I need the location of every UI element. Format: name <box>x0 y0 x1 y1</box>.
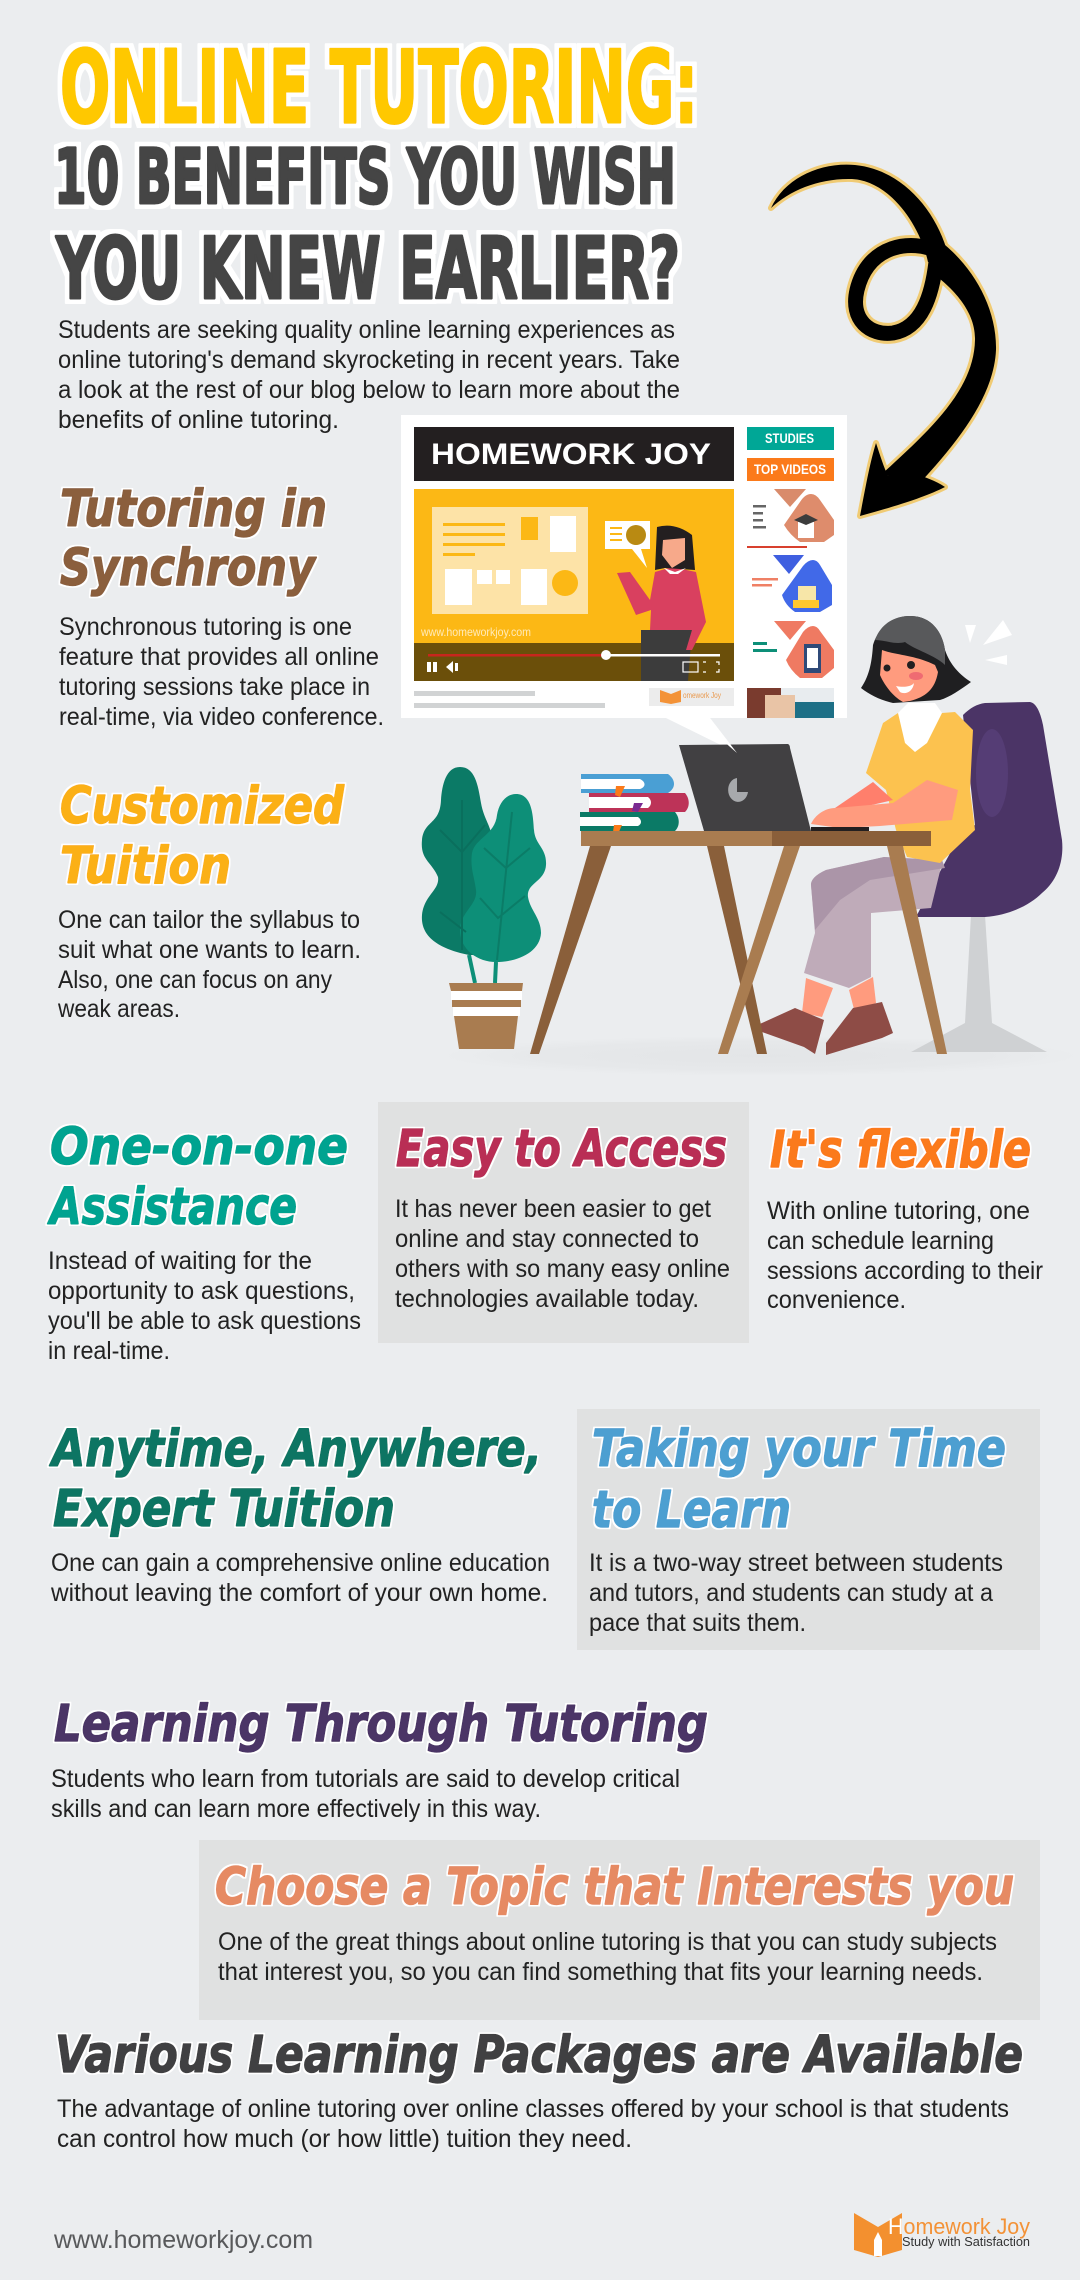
panel: it's flexible: convenience. <box>767 1286 906 1314</box>
icon: curly arrow <box>771 165 996 516</box>
trousers <box>804 857 942 988</box>
panel: one-on-one assistance: you'll be able to ask questions <box>48 1307 361 1335</box>
tab: studies <box>747 427 834 450</box>
panel: one-on-one assistance: One-on-one <box>50 1118 348 1177</box>
panel: easy to access: online and stay connected to <box>395 1225 699 1253</box>
panel: tutoring in synchrony: real-time, via video conference. <box>59 703 384 731</box>
tab: top videos <box>747 458 834 481</box>
icon: surprise sparks <box>965 620 1012 665</box>
panel: anytime, anywhere: Expert Tuition <box>53 1480 395 1539</box>
panel: tutoring in synchrony: Synchronous tutoring is one <box>59 613 352 641</box>
panel: one-on-one assistance: Instead of waiting for the <box>48 1247 312 1275</box>
title: 10 BENEFITS YOU WISH <box>54 132 676 221</box>
panel: choose a topic: One of the great things about online tutoring is that you can study subjects <box>218 1928 997 1956</box>
panel: easy to access: It has never been easier to get <box>395 1195 711 1223</box>
intro text: a look at the rest of our blog below to learn more about the <box>58 376 680 404</box>
panel: taking your time: It is a two-way street between students <box>589 1549 1003 1577</box>
presenter <box>617 526 706 681</box>
panel: customized tuition: weak areas. <box>57 995 180 1023</box>
icon: woman <box>751 616 975 1055</box>
panel: tutoring in synchrony: feature that provides all online <box>59 643 379 671</box>
panel: anytime, anywhere: without leaving the comfort of your own home. <box>50 1579 548 1607</box>
thumbnail: coral <box>747 489 834 548</box>
text placeholders <box>414 691 605 708</box>
panel: it's flexible: sessions according to their <box>767 1257 1043 1285</box>
panel: learning through tutoring: Learning Through Tutoring <box>54 1695 708 1754</box>
hair <box>861 616 971 703</box>
panel: customized tuition: Also, one can focus on any <box>58 966 332 994</box>
panel: anytime, anywhere: One can gain a comprehensive online education <box>51 1549 550 1577</box>
panel: one-on-one assistance: in real-time. <box>48 1337 170 1365</box>
icon: table <box>530 831 947 1054</box>
intro text: benefits of online tutoring. <box>58 406 339 434</box>
banner: Homework Joy: HOMEWORK JOY <box>431 438 711 471</box>
panel: tutoring in synchrony: tutoring sessions take place in <box>59 673 370 701</box>
tab: top videos: TOP VIDEOS <box>754 461 826 477</box>
turtleneck <box>898 703 942 752</box>
panel: easy to access: Easy to Access <box>396 1120 727 1179</box>
intro text: Students are seeking quality online learning experiences as <box>58 316 675 344</box>
panel: learning through tutoring <box>51 1695 708 1823</box>
title <box>54 29 698 319</box>
panel: tutoring in synchrony: Synchrony <box>60 539 317 598</box>
thumbnail: blue <box>752 555 832 612</box>
panel: one-on-one assistance <box>47 1118 361 1365</box>
panel: various learning packages: can control how much (or how little) tuition they need. <box>57 2125 632 2153</box>
banner: Homework Joy <box>414 427 734 481</box>
panel: one-on-one assistance: opportunity to ask questions, <box>48 1277 355 1305</box>
face <box>880 650 938 702</box>
panel: easy to access: others with so many easy online <box>395 1255 730 1283</box>
panel: easy to access: technologies available today. <box>395 1285 699 1313</box>
panel: taking your time <box>577 1409 1040 1650</box>
panel: customized tuition: One can tailor the syllabus to <box>58 906 360 934</box>
callout: pie chart <box>605 521 650 568</box>
panel: taking your time: to Learn <box>592 1481 791 1540</box>
panel: anytime, anywhere <box>49 1420 550 1607</box>
mini logo: omework Joy <box>683 691 721 700</box>
logo: homework joy: Homework Joy <box>888 2214 1030 2239</box>
boots <box>751 1002 893 1055</box>
icon: chair <box>911 702 1062 1052</box>
panel: one-on-one assistance: Assistance <box>47 1178 297 1237</box>
pot <box>449 983 523 1049</box>
video frame: www.homeworkjoy.com <box>420 625 531 639</box>
title: YOU KNEW EARLIER? <box>55 220 680 319</box>
floor shadow <box>443 1036 1079 1076</box>
tab: studies: STUDIES <box>765 430 814 446</box>
panel: customized tuition: Customized <box>60 777 344 836</box>
panel: taking your time: pace that suits them. <box>589 1609 806 1637</box>
panel: easy to access <box>378 1102 749 1343</box>
shirt <box>866 712 975 863</box>
panel: tutoring in synchrony <box>59 480 384 731</box>
thumbnail: photo <box>747 688 834 718</box>
intro text <box>58 316 680 434</box>
panel: taking your time: Taking your Time <box>592 1420 1006 1479</box>
panel: it's flexible <box>767 1121 1043 1314</box>
website url: www.homeworkjoy.com <box>53 2226 313 2254</box>
icon: books <box>580 774 689 834</box>
arm <box>835 782 893 810</box>
logo: homework joy <box>854 2213 1030 2257</box>
intro text: online tutoring's demand skyrocketing in recent years. Take <box>58 346 680 374</box>
panel: choose a topic <box>199 1840 1040 2020</box>
panel: various learning packages <box>55 2026 1023 2153</box>
panel: taking your time: and tutors, and students can study at a <box>589 1579 993 1607</box>
logo: homework joy: Study with Satisfaction <box>902 2234 1030 2249</box>
icon: laptop <box>679 718 869 831</box>
panel: choose a topic: that interest you, so you can find something that fits your learning needs. <box>218 1958 983 1986</box>
panel: it's flexible: can schedule learning <box>767 1227 994 1255</box>
video frame <box>414 489 734 681</box>
panel: learning through tutoring: Students who learn from tutorials are said to develop critical <box>51 1765 680 1793</box>
panel: anytime, anywhere: Anytime, Anywhere, <box>49 1420 542 1479</box>
panel: tutoring in synchrony: Tutoring in <box>60 480 327 539</box>
panel: various learning packages: The advantage of online tutoring over online classes offered by your school is that students <box>57 2095 1009 2123</box>
panel: learning through tutoring: skills and can learn more effectively in this way. <box>51 1795 541 1823</box>
mini logo <box>649 688 734 706</box>
panel: it's flexible: With online tutoring, one <box>767 1197 1030 1225</box>
lower legs <box>802 977 876 1017</box>
panel: video player speech bubble <box>401 415 847 753</box>
thumbnail: red orange <box>753 621 834 678</box>
icon: plant <box>422 767 546 1049</box>
panel: customized tuition: Tuition <box>60 837 231 896</box>
panel: customized tuition <box>57 777 361 1023</box>
panel: customized tuition: suit what one wants to learn. <box>58 936 361 964</box>
